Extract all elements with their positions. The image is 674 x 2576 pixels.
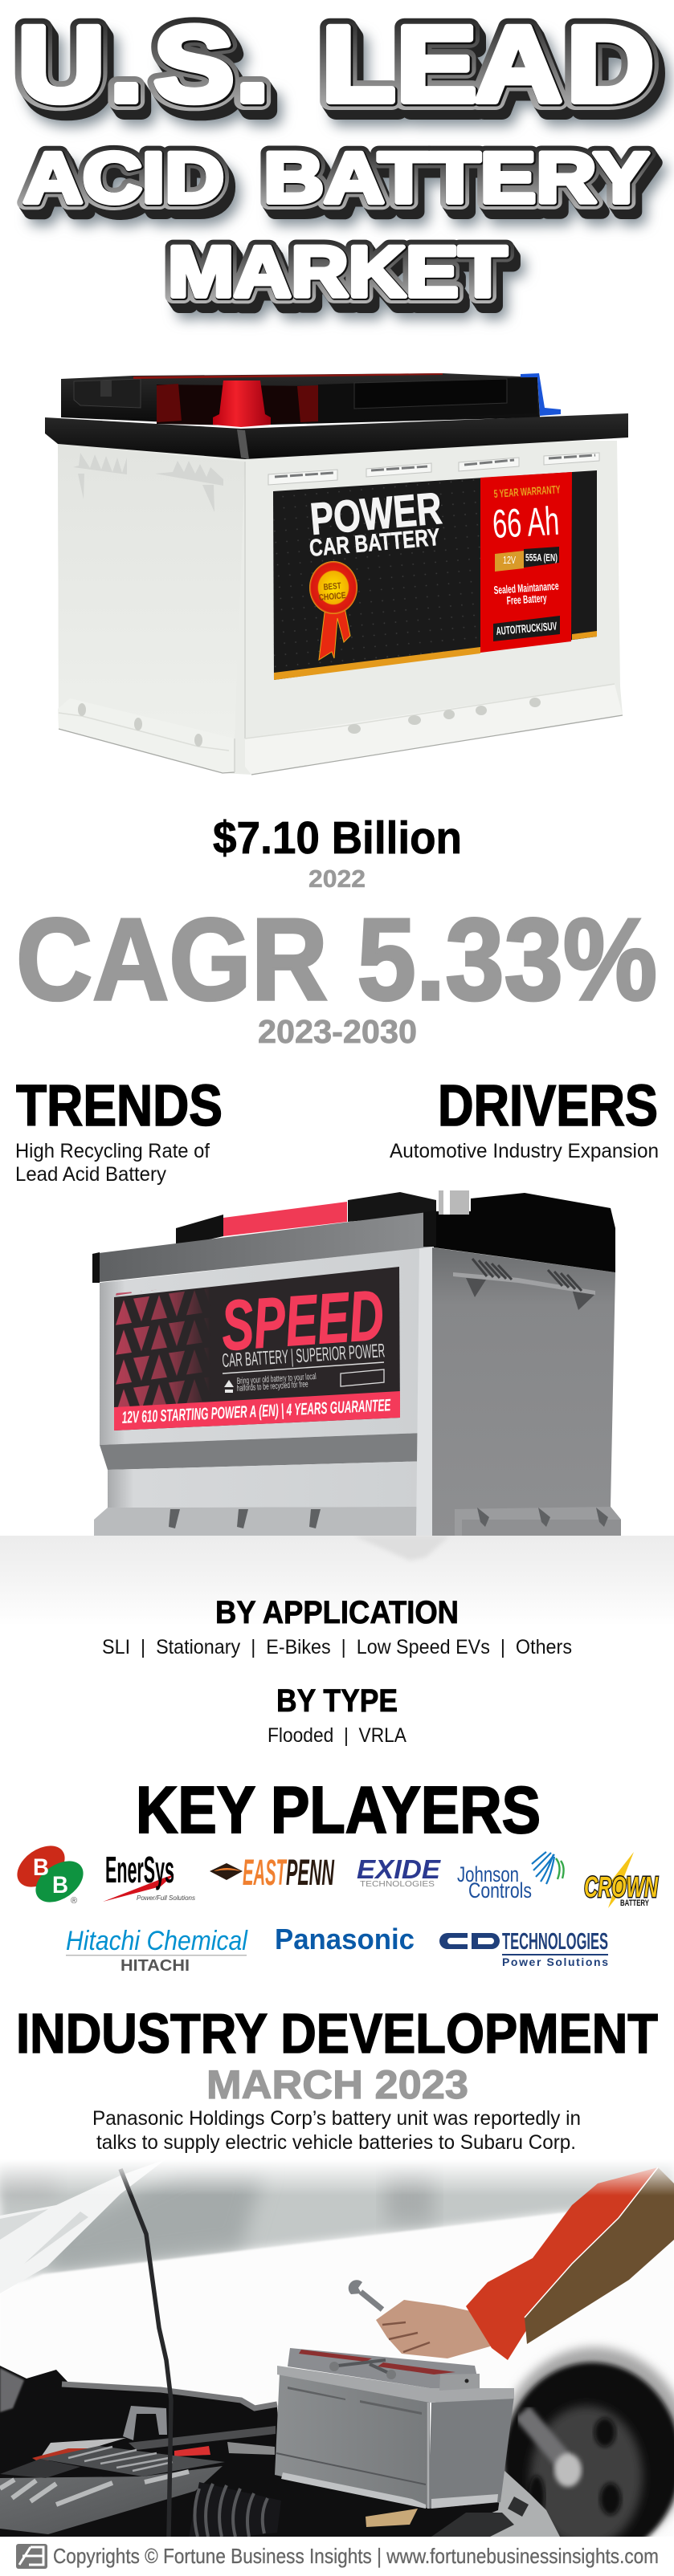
title line 1: LEAD bbox=[322, 4, 654, 124]
side vents bbox=[268, 453, 599, 485]
title line 3: MARKET bbox=[168, 231, 507, 311]
logo: Johnson Controls: Controls bbox=[468, 1878, 532, 1902]
orange stripe bbox=[274, 631, 597, 680]
label bbox=[114, 1267, 400, 1430]
key players heading: KEY PLAYERS bbox=[136, 1772, 541, 1847]
indicator box bbox=[341, 1369, 384, 1386]
type list: Flooded | VRLA bbox=[268, 1724, 406, 1747]
market size value: $7.10 Billion bbox=[213, 812, 462, 864]
by type heading: BY TYPE bbox=[276, 1683, 398, 1719]
top fade bbox=[0, 2159, 674, 2196]
development description: Panasonic Holdings Corp’s battery unit was reportedly in bbox=[92, 2107, 581, 2130]
logo: BB Battery bbox=[10, 1837, 91, 1911]
title line 1: U.S. bbox=[19, 6, 271, 126]
application list: SLI | Stationary | E-Bikes | Low Speed EVs | Others bbox=[102, 1636, 572, 1658]
drivers block: Automotive Industry Expansion bbox=[390, 1140, 659, 1162]
blurred backdrop bbox=[0, 2151, 674, 2280]
development date: MARCH 2023 bbox=[206, 2062, 468, 2107]
logo: Hitachi Chemical bbox=[66, 1926, 248, 1975]
side handles bbox=[453, 1259, 595, 1310]
logo: East Penn: EAST bbox=[243, 1852, 288, 1893]
red strip bbox=[114, 1391, 400, 1430]
title line 2: ACID bbox=[23, 137, 224, 218]
drivers block bbox=[390, 1074, 659, 1162]
title line 2: ACID bbox=[23, 137, 224, 218]
floor gradient bbox=[0, 1536, 674, 1626]
logo: Crown Battery: BATTERY bbox=[620, 1898, 649, 1908]
logo: BB Battery: B bbox=[33, 1854, 49, 1881]
capacity 66 Ah: 66 Ah bbox=[492, 499, 560, 547]
title line 2: ACID bbox=[24, 138, 225, 218]
logo: BB Battery: ® bbox=[71, 1896, 77, 1906]
bracket bbox=[123, 2406, 167, 2440]
bay lip bbox=[62, 2384, 277, 2408]
vertical highlight bbox=[416, 1247, 432, 1536]
logo: Panasonic: Panasonic bbox=[275, 1923, 415, 1955]
upper black cover bbox=[61, 373, 540, 425]
text: PENN bbox=[286, 1852, 335, 1893]
rosette ribbon bbox=[309, 561, 357, 660]
logo: Johnson Controls bbox=[457, 1852, 564, 1902]
title: U.S. Lead Acid Battery Market bbox=[18, 4, 655, 312]
vehicle type box bbox=[493, 616, 560, 641]
voltage box bbox=[495, 547, 559, 572]
free battery text: Free Battery bbox=[506, 592, 547, 607]
footer bbox=[16, 2544, 659, 2569]
title line 2: BATTERY bbox=[263, 137, 649, 218]
silver terminal bbox=[439, 1190, 469, 1215]
logo: Hitachi Chemical: HITACHI bbox=[121, 1957, 190, 1975]
title line 1: U.S. bbox=[18, 4, 269, 124]
red panel bbox=[480, 472, 572, 653]
logo: C&D Technologies: Power Solutions bbox=[502, 1955, 608, 1968]
trends block bbox=[15, 1074, 223, 1186]
warranty text: 5 YEAR WARRANTY bbox=[493, 482, 561, 500]
title line 1: U.S. bbox=[18, 4, 269, 124]
logo: EnerSys: EnerSys bbox=[105, 1849, 174, 1890]
rosette ribbon: CHOICE bbox=[318, 591, 346, 603]
illustration: speed battery bbox=[92, 1190, 621, 1561]
photo: mechanic installing a car battery bbox=[0, 2151, 674, 2558]
raised hood bbox=[0, 2159, 165, 2293]
by application heading: BY APPLICATION bbox=[215, 1595, 459, 1630]
logo: EnerSys bbox=[103, 1849, 195, 1902]
logo: C&D Technologies bbox=[439, 1929, 608, 1968]
base year: 2022 bbox=[308, 865, 366, 893]
strip text: 12V 610 STARTING POWER A (EN) | 4 YEARS GUARANTEE bbox=[121, 1396, 391, 1427]
title line 3: MARKET bbox=[168, 231, 507, 311]
black handle right bbox=[348, 1192, 436, 1222]
voltage box: 555A (EN) bbox=[525, 551, 558, 564]
black top right bbox=[434, 1193, 615, 1272]
trends block: TRENDS bbox=[16, 1074, 223, 1138]
label bbox=[273, 470, 597, 680]
base ledge bbox=[58, 698, 235, 773]
voltage box: 12V bbox=[503, 554, 516, 566]
base notches bbox=[78, 698, 541, 747]
engine bay bbox=[0, 2366, 500, 2537]
logo: Exide Technologies: EXIDE bbox=[357, 1854, 441, 1884]
red terminal bbox=[213, 380, 271, 427]
white car body bbox=[33, 2212, 567, 2281]
black handle left bbox=[176, 1215, 223, 1246]
illustration: white power car battery bbox=[45, 373, 628, 775]
side handles bbox=[73, 453, 223, 512]
label text POWER: POWER bbox=[308, 482, 443, 544]
development description: talks to supply electric vehicle batteries to Subaru Corp. bbox=[96, 2131, 576, 2154]
middle band bbox=[100, 1433, 432, 1470]
title line 1 bbox=[18, 4, 655, 126]
logo: EnerSys: Power/Full Solutions bbox=[137, 1894, 195, 1902]
forecast period: 2023-2030 bbox=[258, 1013, 417, 1050]
red top strip bbox=[223, 1202, 347, 1236]
hand with wrench bbox=[349, 2280, 504, 2358]
side base bbox=[455, 1507, 621, 1536]
tagline: CAR BATTERY | SUPERIOR POWER bbox=[222, 1340, 386, 1372]
title line 2: BATTERY bbox=[264, 138, 650, 218]
trends block: High Recycling Rate of bbox=[15, 1140, 210, 1162]
front face bbox=[100, 1247, 423, 1445]
wheel bbox=[500, 2347, 674, 2558]
battery body bbox=[58, 441, 623, 775]
lower front bbox=[108, 1461, 432, 1508]
title line 2 bbox=[23, 137, 650, 218]
jacket sleeve brown bbox=[525, 2167, 674, 2344]
lower right chrome bumper bbox=[431, 2470, 560, 2537]
recycle note bbox=[224, 1372, 317, 1394]
logo: Crown Battery bbox=[584, 1852, 659, 1908]
brand icon bbox=[16, 2544, 47, 2569]
logo: BB Battery: B bbox=[52, 1872, 68, 1898]
logo: Exide Technologies: TECHNOLOGIES bbox=[360, 1880, 435, 1889]
SPEED wordmark: SPEED bbox=[219, 1275, 386, 1365]
base bbox=[94, 1507, 423, 1536]
vehicle type box: AUTO/TRUCK/SUV bbox=[496, 619, 558, 637]
blue terminal bbox=[521, 373, 561, 416]
side face bbox=[419, 1247, 621, 1536]
lid band bbox=[92, 1211, 434, 1283]
jacket sleeve red bbox=[466, 2167, 658, 2360]
title line 3: MARKET bbox=[169, 232, 508, 312]
prop rod bbox=[121, 2169, 171, 2537]
engine cover bbox=[0, 2446, 225, 2534]
rosette ribbon: BEST bbox=[323, 581, 341, 592]
title line 1: LEAD bbox=[323, 6, 655, 126]
floor shadow bbox=[353, 1536, 450, 1561]
logo: Johnson Controls: Johnson bbox=[457, 1862, 519, 1886]
title line 2: BATTERY bbox=[263, 137, 649, 218]
title line 1: LEAD bbox=[322, 4, 654, 124]
logo: Hitachi Chemical: Hitachi Chemical bbox=[66, 1926, 248, 1956]
lid lip bbox=[45, 413, 628, 459]
development description bbox=[92, 2107, 581, 2154]
recycle note: Bring your old battery to your local bbox=[236, 1372, 317, 1386]
trends block: Lead Acid Battery bbox=[15, 1163, 166, 1186]
triangle pattern bbox=[116, 1288, 207, 1407]
grey battery bbox=[275, 2348, 514, 2509]
sealed text: Sealed Maintanance bbox=[493, 579, 559, 596]
label text CAR BATTERY: CAR BATTERY bbox=[308, 524, 441, 562]
rubber bellows bbox=[189, 2482, 281, 2537]
recycle note: halfords to be recycled for free bbox=[236, 1380, 308, 1394]
